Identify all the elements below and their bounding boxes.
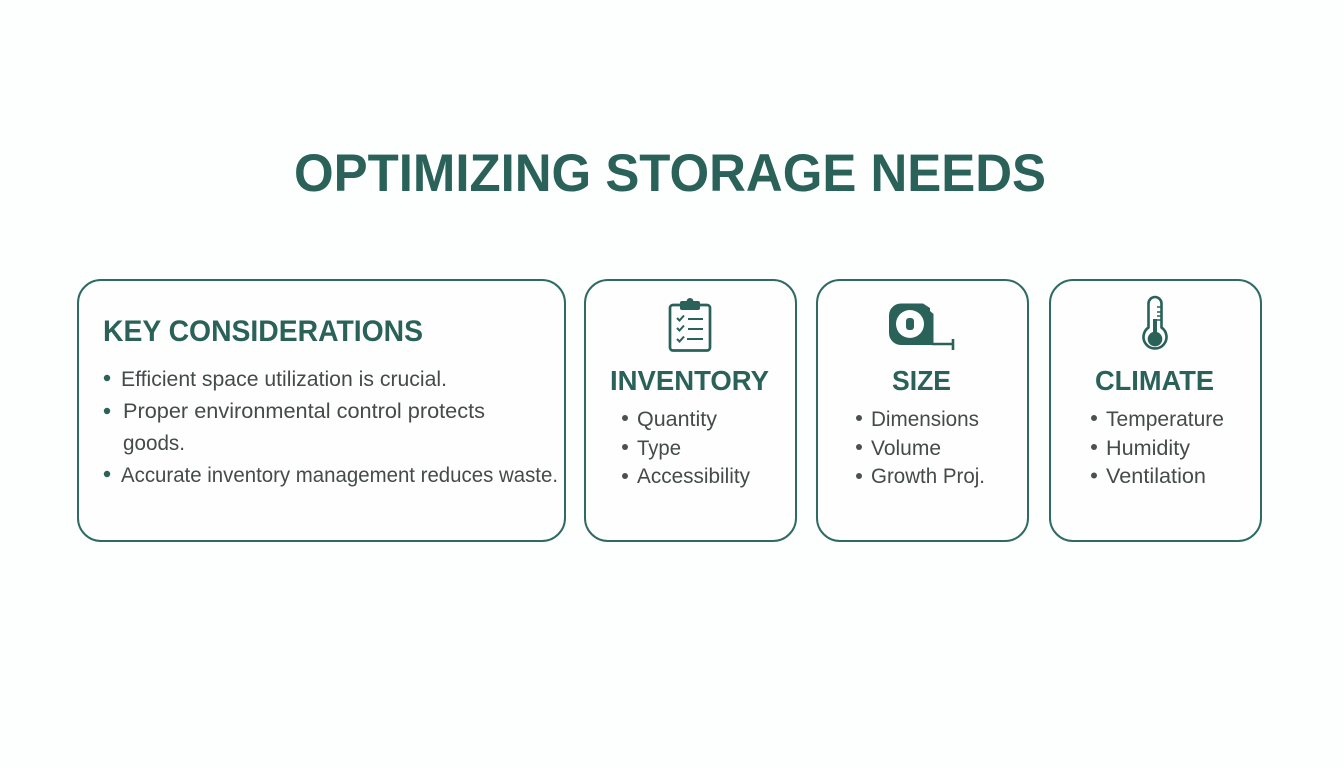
list: size: Volume — [871, 437, 941, 460]
heading: inventory: INVENTORY — [610, 365, 769, 396]
panel: size — [817, 280, 1028, 541]
list: inventory: Type — [637, 437, 681, 460]
list: climate — [1091, 408, 1224, 488]
panel: climate — [1050, 280, 1261, 541]
heading: climate: CLIMATE — [1095, 365, 1214, 396]
panel: inventory — [585, 280, 796, 541]
list: size — [856, 408, 985, 488]
list: inventory: Quantity — [637, 408, 717, 431]
list: size: Dimensions — [871, 408, 979, 431]
list: key considerations: Efficient space utilization is crucial. — [121, 368, 447, 391]
list: key considerations: goods. — [123, 432, 185, 455]
list: key considerations: Accurate inventory management reduces waste. — [121, 464, 558, 487]
list: key considerations: Proper environmental control protects — [123, 400, 485, 423]
list: climate: Ventilation — [1106, 465, 1206, 488]
icon: clipboard checklist — [670, 298, 710, 350]
list: key considerations — [104, 368, 558, 487]
list: inventory: Accessibility — [637, 465, 750, 488]
icon: thermometer — [1143, 297, 1166, 348]
list: size: Growth Proj. — [871, 465, 985, 488]
heading: size: SIZE — [892, 365, 951, 396]
list: climate: Temperature — [1106, 408, 1224, 431]
heading: key considerations: KEY CONSIDERATIONS — [103, 315, 423, 348]
panel: key considerations — [78, 280, 565, 541]
title: OPTIMIZING STORAGE NEEDS — [294, 144, 1046, 203]
list: inventory — [622, 408, 750, 488]
icon: tape measure — [889, 304, 953, 350]
list: climate: Humidity — [1106, 437, 1191, 460]
